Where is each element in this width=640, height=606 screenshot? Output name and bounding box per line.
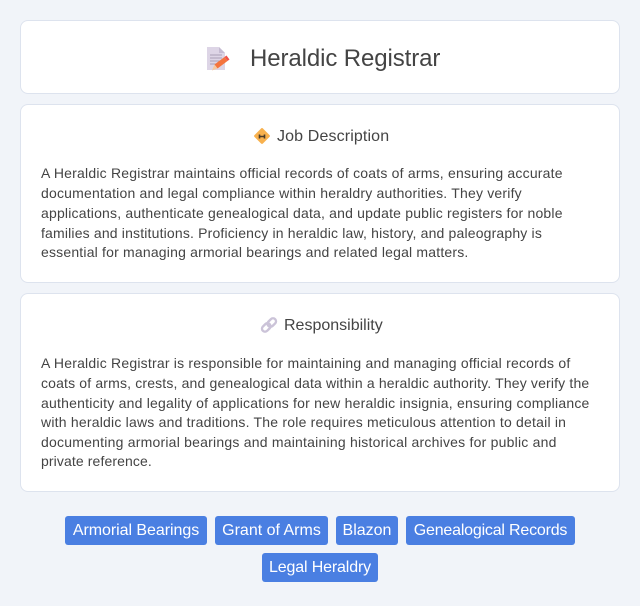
text block: responsibility: documenting armorial bearings and maintaining historical archives for public and (41, 434, 557, 450)
tag: Armorial Bearings (65, 516, 207, 545)
icon: construction diamond (254, 128, 270, 144)
panel: job description (20, 104, 620, 283)
icon: chain link (260, 317, 278, 333)
heading: job description: Job Description (277, 128, 389, 145)
text block: job description: essential for managing armorial bearings and related legal matters. (41, 244, 469, 260)
text block: job description: A Heraldic Registrar maintains official records of coats of arms, ensuring accurate (41, 165, 563, 181)
text block: responsibility (41, 355, 590, 469)
text block: job description (41, 165, 563, 260)
tag: Legal Heraldry (262, 553, 378, 582)
icon: memo with pencil (207, 47, 230, 70)
tag: Grant of Arms: Grant of Arms (222, 522, 321, 539)
panel: title card (20, 20, 620, 94)
text block: responsibility: authenticity and legality of applications for new heraldic insignia, ensuring compliance (41, 395, 590, 411)
tag: Armorial Bearings: Armorial Bearings (73, 522, 199, 539)
text block: responsibility: A Heraldic Registrar is responsible for maintaining and managing official records of (41, 355, 570, 371)
tag: Blazon (336, 516, 398, 545)
text block: responsibility: private reference. (41, 453, 152, 469)
tag: Genealogical Records (406, 516, 575, 545)
text block: job description: applications, authenticate genealogical data, and update public registers for noble (41, 205, 563, 221)
tag: Legal Heraldry: Legal Heraldry (269, 559, 371, 576)
text block: job description: documentation and legal compliance within heraldry authorities. They verify (41, 185, 522, 201)
text block: responsibility: with heraldic laws and traditions. The role requires meticulous attention to detail in (41, 414, 566, 430)
panel: responsibility (20, 293, 620, 492)
title: Heraldic Registrar (250, 45, 440, 72)
text block: job description: families and institutions. Proficiency in heraldic law, history, and paleography is (41, 225, 542, 241)
tag: Blazon: Blazon (343, 522, 391, 539)
tag: Genealogical Records: Genealogical Records (414, 522, 567, 539)
text block: responsibility: coats of arms, crests, and genealogical data within a heraldic authority. They verify the (41, 375, 589, 391)
tag: Grant of Arms (215, 516, 328, 545)
heading: responsibility: Responsibility (284, 317, 383, 334)
